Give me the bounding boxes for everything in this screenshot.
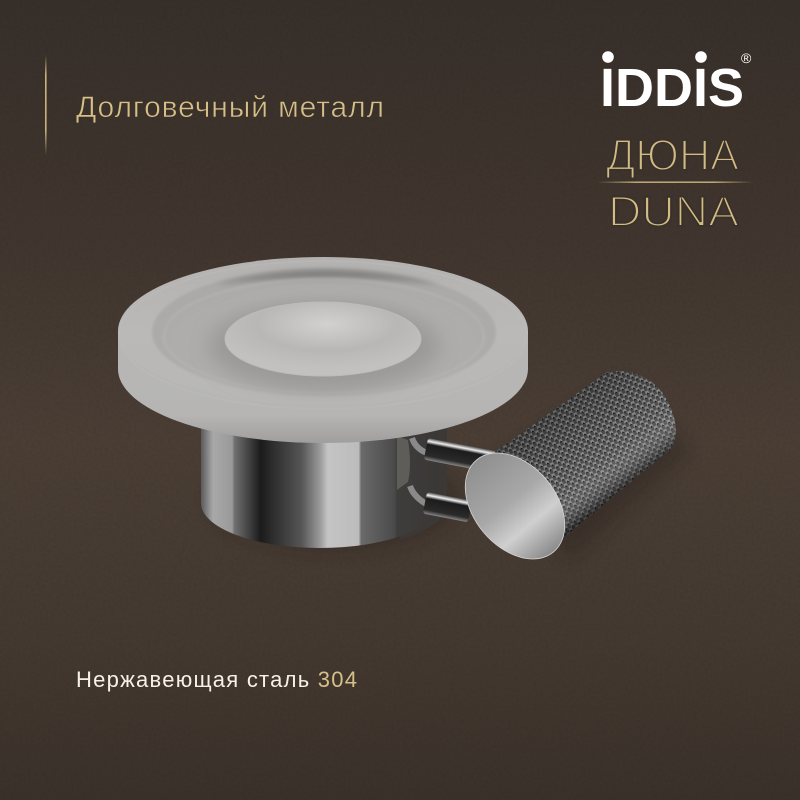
logo dot: second i xyxy=(695,51,707,63)
groove shadow under dome xyxy=(210,303,438,389)
plate top rim xyxy=(118,257,528,405)
series name: Дюна: ДЮНА xyxy=(606,131,740,180)
wall bracket plate xyxy=(400,428,447,540)
inner recess xyxy=(152,268,496,396)
caption: Нержавеющая сталь 304 xyxy=(76,667,357,692)
lower rod xyxy=(423,492,472,522)
central dome xyxy=(225,302,421,376)
rim highlight xyxy=(119,261,527,409)
curved rod joints xyxy=(410,438,430,506)
wall shadow xyxy=(210,380,690,560)
cylinder holder xyxy=(201,370,439,548)
gold divider xyxy=(597,182,753,183)
heading: Долговечный металл xyxy=(76,91,384,124)
series name: Duna: DUNA xyxy=(608,188,739,236)
logo dot: first i xyxy=(602,51,614,63)
plate edge xyxy=(118,331,528,443)
recess ring xyxy=(164,279,484,393)
registered mark: ® xyxy=(741,50,752,66)
accent vertical line xyxy=(45,55,47,155)
knurled collar xyxy=(397,436,410,490)
knurled handle body xyxy=(495,371,676,543)
recess shadow band xyxy=(215,270,440,285)
product: soap dish xyxy=(118,257,690,578)
upper rod xyxy=(424,438,497,473)
glass plate xyxy=(118,257,528,443)
logo: IDDIS: IDDIS xyxy=(600,58,744,118)
handle end cap xyxy=(445,434,585,578)
